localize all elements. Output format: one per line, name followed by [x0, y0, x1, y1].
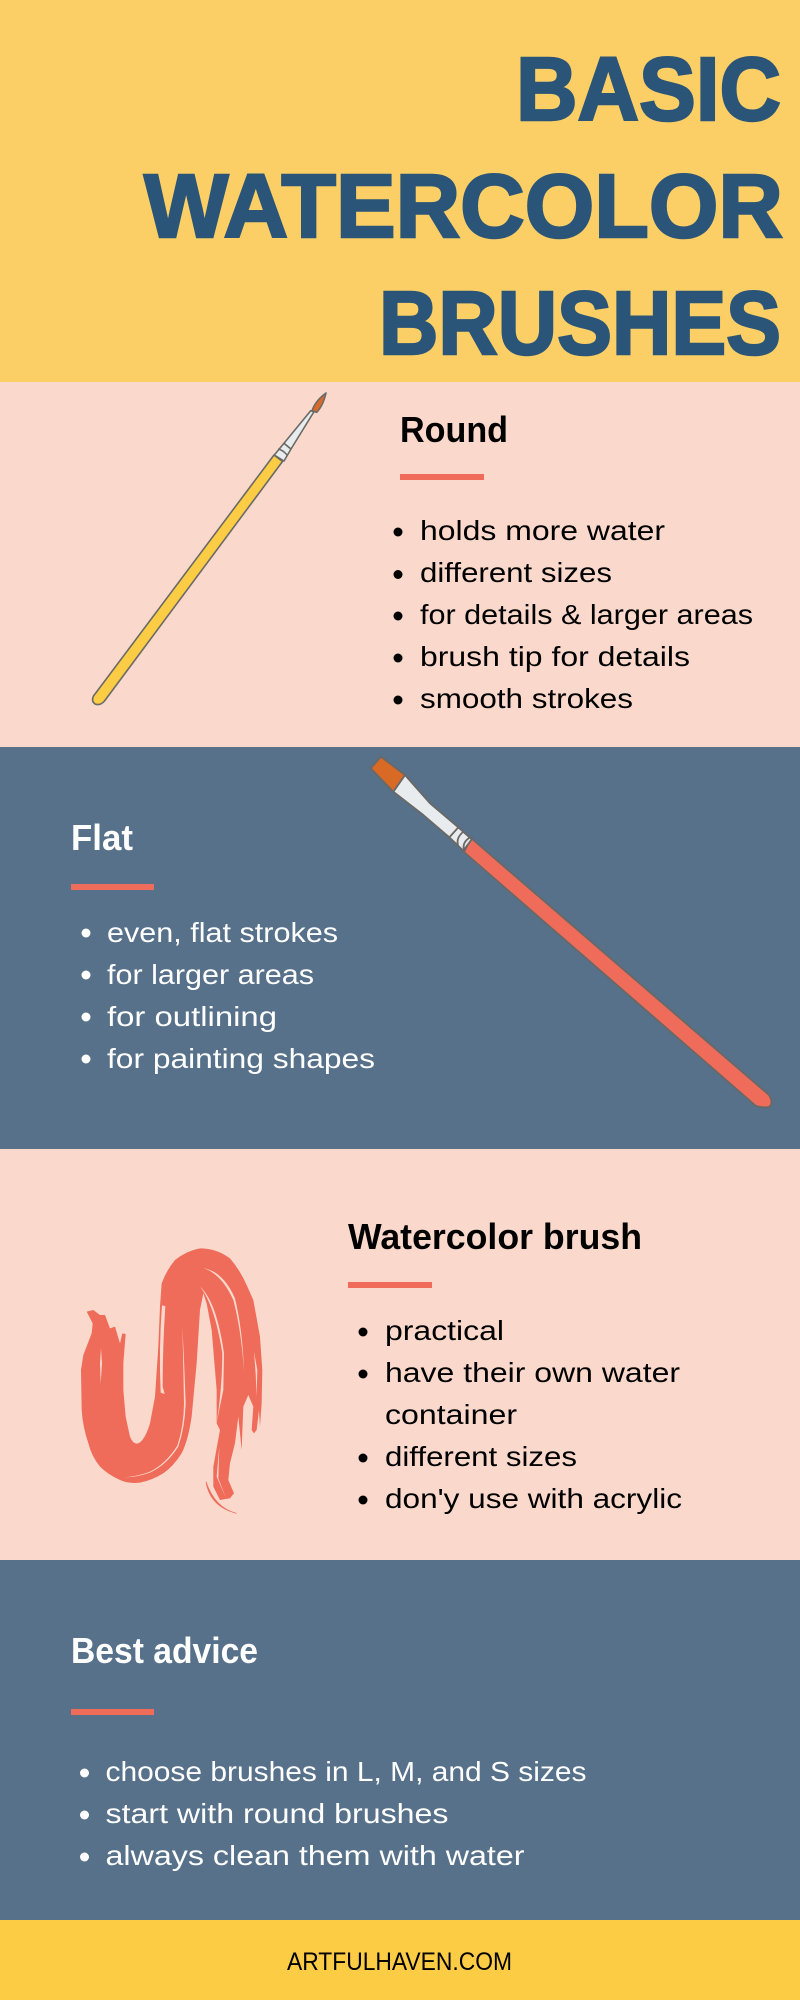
icon: flat brush	[371, 757, 772, 1107]
panel: flat brush	[0, 747, 800, 1149]
heading: Round: Round	[400, 409, 508, 450]
title: BASIC	[516, 40, 781, 140]
icon: paint brush stroke	[81, 1248, 262, 1513]
bullet list: flat: for painting shapes	[107, 1043, 375, 1074]
accent rule	[71, 1709, 154, 1715]
bullet list: best advice	[80, 1756, 586, 1871]
bullet list: watercolor brush: practical	[385, 1315, 504, 1346]
bullet list: watercolor brush: container	[385, 1399, 517, 1430]
icon: round brush	[93, 393, 326, 705]
title	[144, 40, 783, 374]
accent rule	[400, 474, 484, 480]
title: WATERCOLOR	[144, 157, 783, 257]
heading: Flat: Flat	[71, 817, 133, 858]
bullet list: round: holds more water	[420, 515, 665, 546]
panel: best advice	[0, 1560, 800, 1920]
panel: title header	[0, 0, 800, 382]
heading: Best advice: Best advice	[71, 1630, 258, 1671]
bullet list: round: brush tip for details	[420, 641, 690, 672]
bullet list: best advice: choose brushes in L, M, and S sizes	[106, 1756, 586, 1787]
panel: round brush	[0, 382, 800, 747]
bullet list: round: for details & larger areas	[420, 599, 753, 630]
bullet list: round: smooth strokes	[420, 683, 633, 714]
accent rule	[348, 1282, 432, 1288]
bullet list: flat	[82, 917, 375, 1074]
bullet list: flat: even, flat strokes	[107, 917, 338, 948]
bullet list: watercolor brush: different sizes	[385, 1441, 577, 1472]
bullet list: watercolor brush	[358, 1315, 682, 1514]
bullet list: flat: for outlining	[107, 1001, 277, 1032]
bullet list: flat: for larger areas	[107, 959, 314, 990]
bullet list: watercolor brush: don'y use with acrylic	[385, 1483, 682, 1514]
accent rule	[71, 884, 154, 890]
bullet list: watercolor brush: have their own water	[385, 1357, 680, 1388]
footer credit: ARTFULHAVEN.COM	[287, 1948, 512, 1976]
bullet list: best advice: always clean them with water	[106, 1840, 524, 1871]
bullet list: best advice: start with round brushes	[106, 1798, 448, 1829]
heading: Watercolor brush: Watercolor brush	[348, 1216, 642, 1257]
panel: footer	[0, 1920, 800, 2000]
bullet list: round	[394, 515, 753, 714]
bullet list: round: different sizes	[420, 557, 612, 588]
panel: watercolor brush	[0, 1149, 800, 1560]
